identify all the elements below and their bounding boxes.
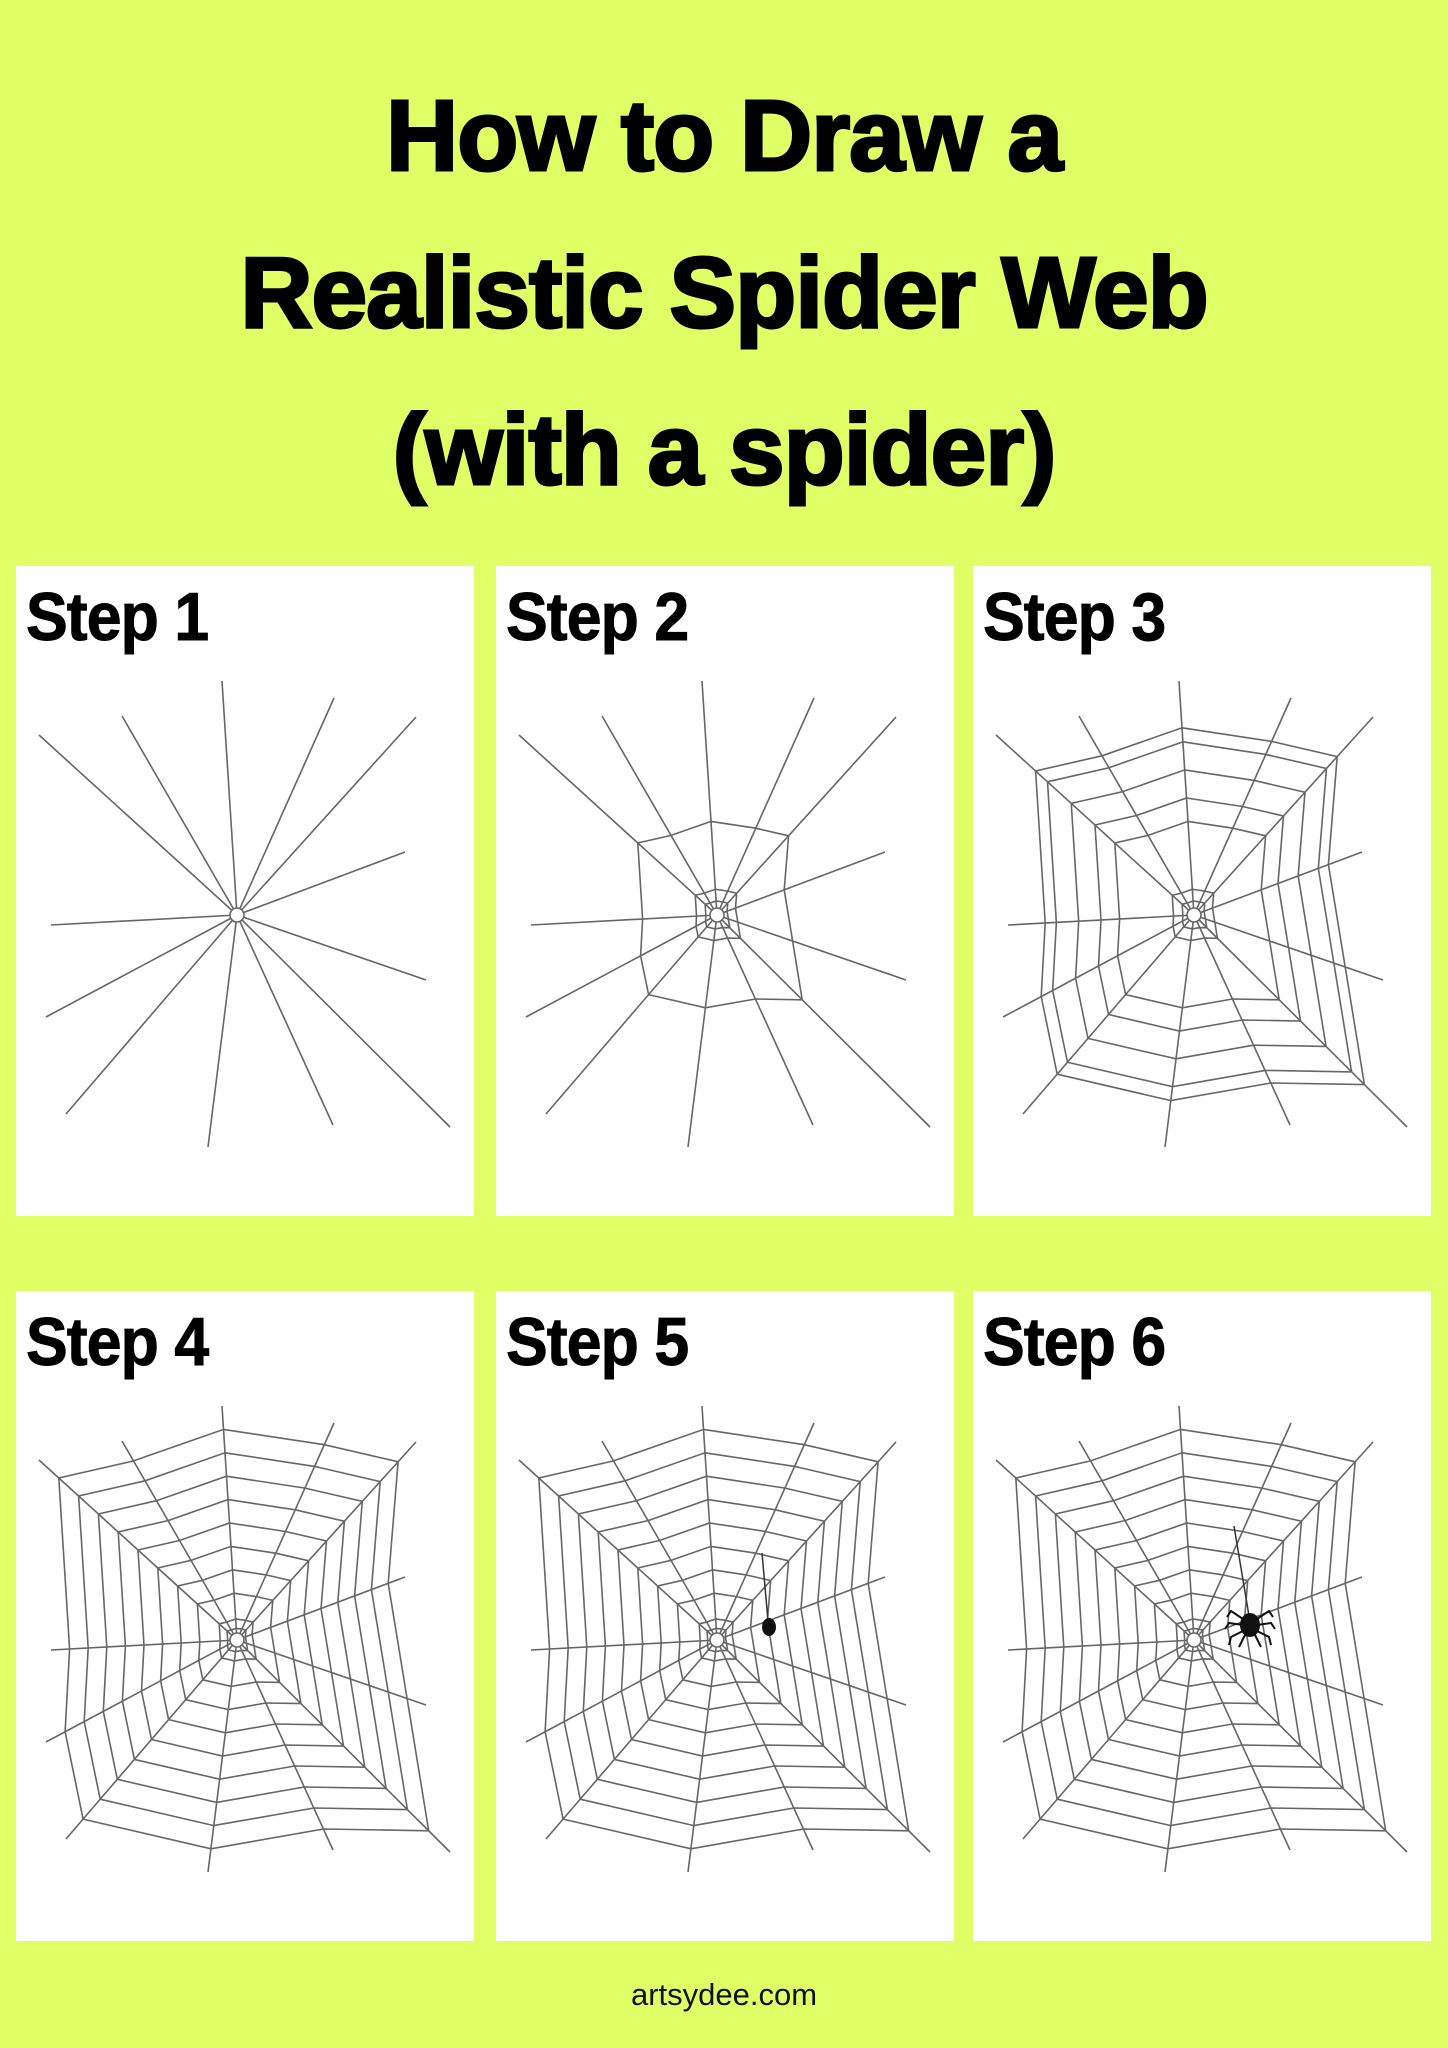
drawing: spokes with inner rings — [518, 681, 930, 1148]
heading: step 6: Step 6 — [983, 1304, 1165, 1380]
heading: step 4: Step 4 — [26, 1304, 208, 1380]
panel: step 4 — [16, 1291, 474, 1941]
panel: step 6 — [973, 1291, 1431, 1941]
heading: step 1: Step 1 — [26, 579, 208, 655]
heading: step 5: Step 5 — [506, 1304, 688, 1380]
title — [240, 80, 1208, 506]
panel: step 3 — [973, 566, 1431, 1216]
drawing: web with outer rings — [996, 681, 1408, 1148]
panel: step 1 — [16, 566, 474, 1216]
title: (with a spider) — [393, 394, 1055, 506]
drawing: full web — [38, 1406, 450, 1872]
panel: step 2 — [496, 566, 954, 1216]
drawing: web with spider — [996, 1406, 1408, 1872]
title: How to Draw a — [386, 80, 1062, 192]
heading: step 3: Step 3 — [983, 579, 1165, 655]
panel: step 5 — [496, 1291, 954, 1941]
drawing: web with hanging spider body — [518, 1406, 930, 1872]
heading: step 2: Step 2 — [506, 579, 688, 655]
footer: artsydee.com — [631, 1977, 817, 2012]
title: Realistic Spider Web — [240, 237, 1208, 349]
drawing: spokes — [38, 681, 450, 1148]
